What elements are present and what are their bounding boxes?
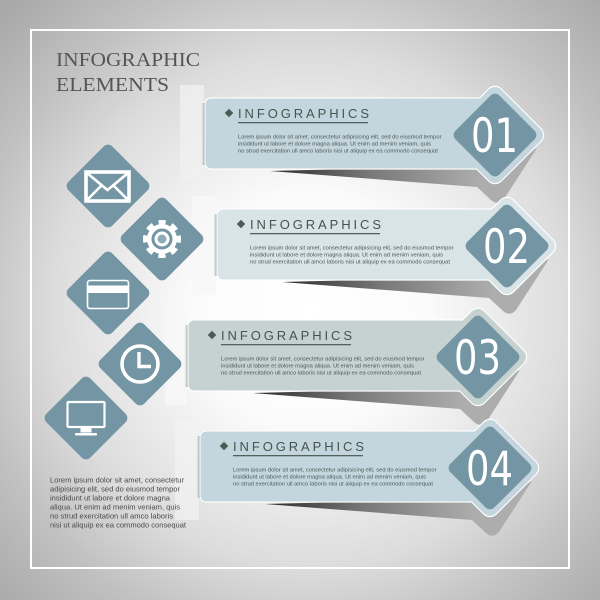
paper strip 03 bbox=[165, 310, 187, 405]
heading 02: INFOGRAPHICS bbox=[250, 217, 381, 232]
bullet 03 bbox=[208, 331, 216, 339]
shadow 04 bbox=[265, 481, 532, 536]
left text block: adipisicing elit, sed do eiusmod tempor bbox=[50, 484, 180, 494]
text 03 bbox=[221, 356, 425, 376]
panel: card 01 bbox=[180, 83, 547, 203]
number badge 01 bbox=[451, 91, 539, 179]
panel: card 03 bbox=[165, 305, 530, 425]
edge shadow 04 bbox=[196, 436, 200, 498]
number badge 04 bbox=[446, 424, 534, 512]
text 01: Lorem ipsum dolor sit amet, consectetur adipisicing elit, sed do eiusmod tempor bbox=[238, 134, 442, 140]
text 04 bbox=[233, 468, 437, 488]
title: INFOGRAPHIC bbox=[56, 49, 200, 71]
number badge 03 bbox=[434, 313, 522, 401]
paper strip 02 bbox=[192, 196, 216, 295]
text 03: Lorem ipsum dolor sit amet, consectetur adipisicing elit, sed do eiusmod tempor bbox=[221, 356, 425, 362]
underline 02 bbox=[250, 233, 380, 234]
text 01 bbox=[238, 134, 442, 154]
text 01: no strud exercitation ull amco laboris nisi ut aliquip ex ea commodo consequat bbox=[238, 148, 438, 154]
edge shadow 01 bbox=[201, 103, 205, 165]
left text block: Lorem ipsum dolor sit amet, consectetur bbox=[50, 476, 184, 484]
heading 04: INFOGRAPHICS bbox=[233, 439, 364, 454]
edge shadow 02 bbox=[213, 214, 217, 276]
icon: monitor bbox=[42, 374, 130, 462]
text 04: insididunt ut labore et dolore magna aliqua. Ut enim ad menim veniam, quis bbox=[233, 474, 426, 480]
left text block: nisi ut aliquip ex ea commodo consequat bbox=[50, 520, 187, 530]
text 04: Lorem ipsum dolor sit amet, consectetur adipisicing elit, sed do eiusmod tempor bbox=[233, 468, 437, 474]
heading 01: INFOGRAPHICS bbox=[238, 106, 369, 121]
text 02 bbox=[250, 246, 454, 266]
left text block bbox=[50, 476, 187, 530]
paper strip 01 bbox=[180, 85, 204, 182]
text 03: no strud exercitation ull amco laboris nisi ut aliquip ex ea commodo consequat bbox=[221, 370, 421, 376]
shadow 03 bbox=[253, 370, 520, 425]
icon: clock bbox=[96, 320, 184, 408]
left text block: insididunt ut labore et dolore magna bbox=[50, 494, 171, 502]
text 03: insididunt ut labore et dolore magna aliqua. Ut enim ad menim veniam, quis bbox=[221, 364, 414, 370]
number badge 02 bbox=[463, 202, 551, 290]
text 02: insididunt ut labore et dolore magna aliqua. Ut enim ad menim veniam, quis bbox=[250, 252, 443, 258]
ribbon 04 bbox=[200, 416, 542, 520]
ribbon 03 bbox=[188, 305, 530, 409]
panel: card 02 bbox=[192, 194, 559, 314]
underline 03 bbox=[221, 344, 351, 345]
underline 04 bbox=[233, 455, 363, 456]
paper strip 04 bbox=[175, 420, 199, 520]
bullet 02 bbox=[237, 220, 245, 228]
number 02: 02 bbox=[483, 220, 530, 275]
bullet 04 bbox=[220, 442, 228, 450]
edge shadow 03 bbox=[184, 325, 188, 387]
number 04: 04 bbox=[466, 442, 513, 497]
text 01: insididunt ut labore et dolore magna aliqua. Ut enim ad menim veniam, quis bbox=[238, 142, 431, 148]
title bbox=[56, 49, 200, 96]
text 02: no strud exercitation ull amco laboris nisi ut aliquip ex ea commodo consequat bbox=[250, 260, 450, 266]
icon: credit card bbox=[64, 249, 152, 337]
panel: card 04 bbox=[175, 416, 542, 536]
text 04: no strud exercitation ull amco laboris nisi ut aliquip ex ea commodo consequat bbox=[233, 482, 433, 488]
shadow 01 bbox=[270, 148, 537, 203]
ribbon 01 bbox=[205, 83, 547, 187]
bullet 01 bbox=[225, 109, 233, 117]
icon: gear bbox=[118, 195, 206, 283]
shadow 02 bbox=[282, 259, 549, 314]
number 01: 01 bbox=[471, 109, 518, 164]
title: ELEMENTS bbox=[56, 74, 169, 96]
heading 03: INFOGRAPHICS bbox=[221, 328, 352, 343]
icon: envelope bbox=[64, 142, 152, 230]
underline 01 bbox=[238, 122, 368, 123]
left text block: no strud exercitation ull amco laboris bbox=[50, 512, 173, 520]
ribbon 02 bbox=[217, 194, 559, 298]
left text block: aliqua. Ut enim ad menim veniam, quis bbox=[50, 502, 180, 512]
number 03: 03 bbox=[454, 331, 501, 386]
text 02: Lorem ipsum dolor sit amet, consectetur adipisicing elit, sed do eiusmod tempor bbox=[250, 246, 454, 252]
